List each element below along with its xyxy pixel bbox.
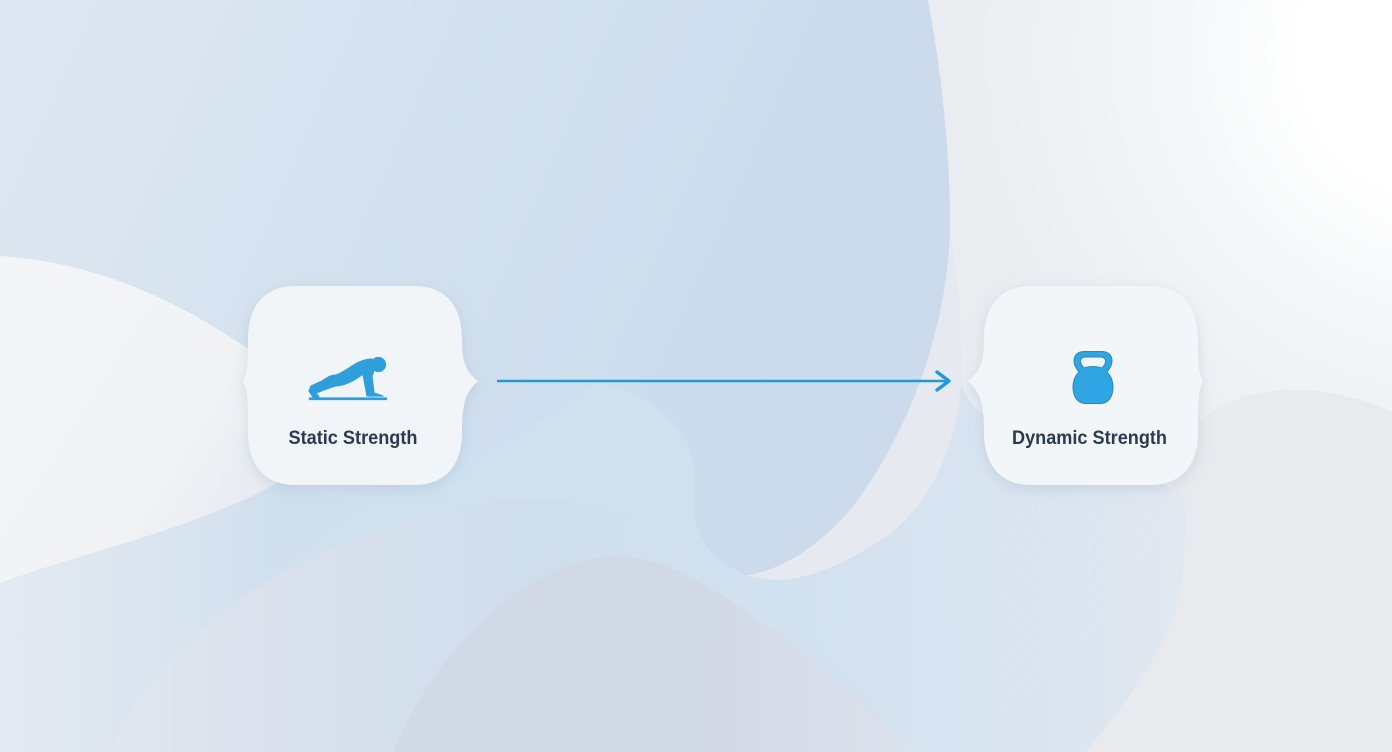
- left white wave: [0, 256, 277, 583]
- arrow: [497, 372, 949, 390]
- card shape: [968, 286, 1203, 485]
- large blue blob: [0, 0, 950, 576]
- card: static strength: [243, 286, 478, 485]
- right lower grey shape: [1080, 390, 1392, 752]
- icon: plank figure: [309, 358, 386, 400]
- label: Dynamic Strength: [1012, 428, 1167, 449]
- lower band: [109, 499, 915, 752]
- sweeping blue band: [0, 380, 1186, 752]
- pale crescent: [745, 230, 962, 580]
- card: dynamic strength: [968, 286, 1203, 485]
- card shape: [243, 286, 478, 485]
- light teal wave: [237, 383, 745, 633]
- label: Static Strength: [288, 428, 418, 449]
- bottom grey hill: [393, 556, 915, 752]
- icon: kettlebell: [1073, 352, 1113, 404]
